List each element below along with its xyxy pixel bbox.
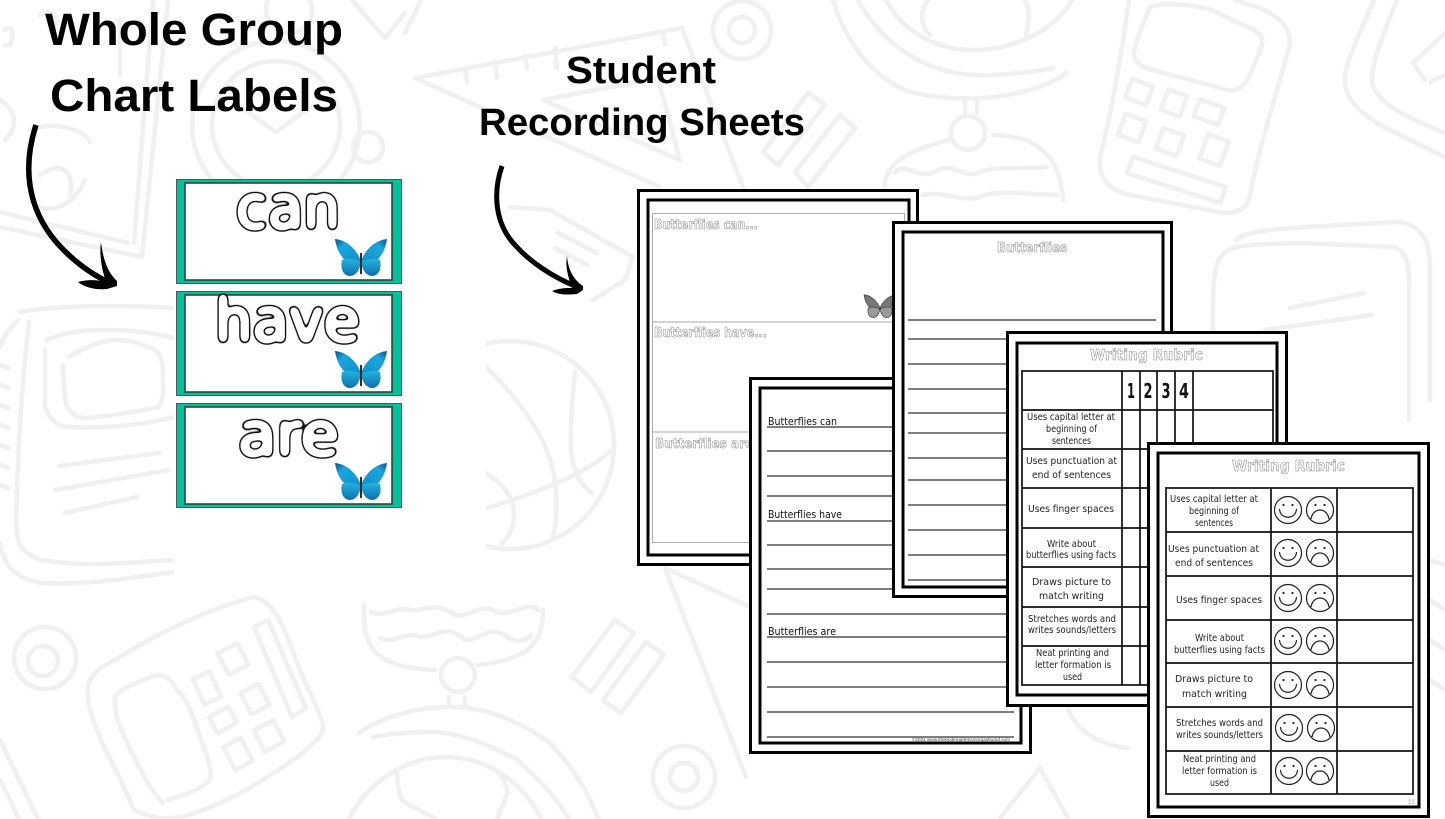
recording sheet: writing rubric with faces: letter formation is bbox=[1182, 766, 1257, 777]
recording sheet: writing rubric with faces: 22 bbox=[1408, 800, 1415, 806]
recording sheet: writing rubric with faces: used bbox=[1210, 778, 1229, 789]
icons: happy and sad faces bbox=[1274, 496, 1334, 784]
recording sheet: writing rubric with number scale: used bbox=[1063, 672, 1082, 683]
card: have: have bbox=[215, 286, 360, 356]
recording sheet: butterflies can have are lines: ©2021 www.thekindergartensmorgasboard.com bbox=[912, 736, 1010, 742]
recording sheet: writing rubric with faces: Stretches words and bbox=[1176, 718, 1263, 729]
recording sheet: writing rubric with faces: match writing bbox=[1182, 689, 1247, 700]
recording sheet: writing rubric with faces: Uses capital letter at bbox=[1170, 494, 1258, 505]
recording sheet: writing rubric with number scale bbox=[1008, 332, 1286, 706]
title: student recording sheets: Recording Sheets bbox=[479, 102, 805, 144]
recording sheet: writing rubric with number scale: 1 bbox=[1127, 379, 1135, 403]
recording sheet: writing rubric with number scale: Uses punctuation at bbox=[1026, 456, 1117, 467]
recording sheet: writing rubric with number scale: beginning of bbox=[1046, 424, 1098, 435]
arrow: to recording sheets bbox=[497, 166, 583, 295]
recording sheet: writing rubric with number scale: Stretches words and bbox=[1028, 614, 1116, 625]
recording sheet: writing rubric with number scale: 2 bbox=[1144, 379, 1152, 403]
title: student recording sheets: Student bbox=[566, 50, 716, 92]
card: are bbox=[176, 400, 402, 508]
recording sheet: writing rubric with faces: Uses finger spaces bbox=[1176, 595, 1262, 606]
recording sheet: writing rubric with number scale: Neat printing and bbox=[1036, 648, 1109, 659]
title: student recording sheets bbox=[479, 50, 805, 144]
recording sheet: writing rubric with faces: Neat printing and bbox=[1183, 754, 1256, 765]
arrow: to chart labels bbox=[29, 125, 117, 289]
card: can bbox=[176, 173, 402, 284]
recording sheet: writing rubric with number scale: butterflies using facts bbox=[1026, 550, 1116, 561]
chart labels: word cards bbox=[176, 173, 402, 508]
title: whole group chart labels bbox=[45, 4, 343, 121]
recording sheet: writing rubric with number scale: match writing bbox=[1039, 591, 1104, 602]
recording sheet: writing rubric with faces: beginning of bbox=[1189, 506, 1240, 517]
recording sheet: writing rubric with faces bbox=[1148, 444, 1428, 816]
recording sheet: writing rubric with faces: end of sentences bbox=[1175, 558, 1253, 569]
recording sheet: writing rubric with faces: writes sounds/letters bbox=[1176, 730, 1263, 741]
recording sheet: writing rubric with faces: Uses punctuation at bbox=[1168, 544, 1259, 555]
recording sheet: butterflies lined page: Butterflies bbox=[997, 241, 1067, 256]
recording sheet: butterflies can have are boxes: Butterflies are... bbox=[655, 437, 767, 452]
card: have bbox=[176, 286, 402, 396]
card: can: can bbox=[236, 173, 340, 243]
title: whole group chart labels: Chart Labels bbox=[50, 70, 338, 121]
recording sheet: butterflies can have are lines: Butterflies can bbox=[768, 416, 837, 428]
recording sheet: writing rubric with number scale: Writing Rubric bbox=[1090, 346, 1203, 364]
recording sheet: butterflies can have are boxes: Butterflies can... bbox=[654, 218, 758, 233]
recording sheet: butterflies lined page bbox=[894, 222, 1172, 596]
recording sheet: writing rubric with number scale: letter formation is bbox=[1035, 660, 1111, 671]
recording sheet: butterflies can have are boxes bbox=[638, 190, 918, 564]
recording sheet: writing rubric with number scale: sentences bbox=[1052, 436, 1091, 447]
recording sheet: writing rubric with number scale: Write about bbox=[1047, 539, 1096, 550]
recording sheet: butterflies can have are boxes: Butterflies have... bbox=[654, 326, 767, 341]
card: are: are bbox=[238, 400, 339, 470]
recording sheet: writing rubric with faces: Draws picture to bbox=[1175, 674, 1253, 685]
recording sheet: butterflies can have are lines: Butterflies have bbox=[768, 509, 842, 521]
recording sheet: butterflies can have are lines: Butterflies are bbox=[768, 626, 836, 638]
recording sheet: writing rubric with number scale: 4 bbox=[1179, 379, 1189, 403]
recording sheet: writing rubric with number scale: end of sentences bbox=[1032, 470, 1111, 481]
recording sheet: writing rubric with number scale: 3 bbox=[1162, 379, 1170, 403]
recording sheet: writing rubric with number scale: writes sounds/letters bbox=[1028, 625, 1116, 636]
recording sheet: writing rubric with number scale: Uses capital letter at bbox=[1027, 412, 1115, 423]
recording sheet: writing rubric with faces: butterflies using facts bbox=[1174, 645, 1265, 656]
recording sheet: writing rubric with number scale: Uses finger spaces bbox=[1028, 504, 1114, 515]
recording sheet: writing rubric with faces: sentences bbox=[1195, 518, 1233, 529]
recording sheet: writing rubric with faces: Writing Rubric bbox=[1232, 457, 1345, 475]
title: whole group chart labels: Whole Group bbox=[45, 4, 343, 55]
recording sheet: writing rubric with number scale: Draws picture to bbox=[1032, 577, 1111, 588]
recording sheet: writing rubric with faces: Write about bbox=[1195, 633, 1244, 644]
recording sheet: butterflies can have are lines bbox=[750, 378, 1030, 752]
